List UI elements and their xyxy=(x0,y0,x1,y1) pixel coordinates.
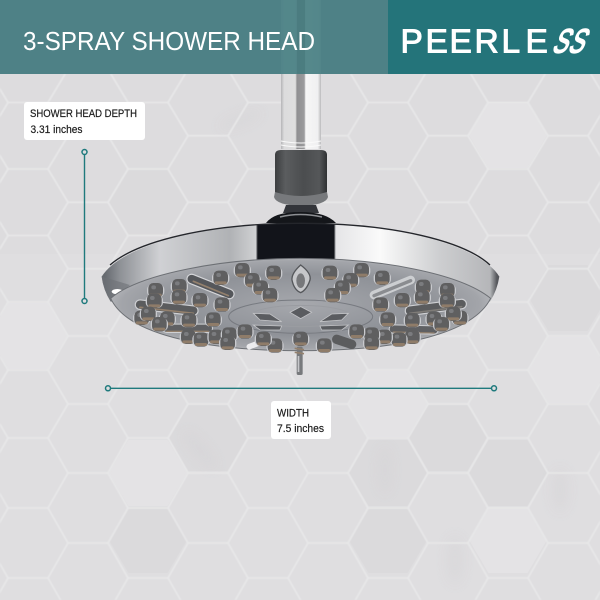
depth label: SHOWER HEAD DEPTH xyxy=(30,108,137,120)
swivel collar xyxy=(266,150,336,223)
depth dimension line xyxy=(82,150,87,304)
header band: brand panel xyxy=(388,0,600,74)
brand logo: S xyxy=(548,23,579,60)
rim upper dark edge xyxy=(110,223,490,265)
depth label: 3.31 inches xyxy=(30,124,83,136)
width dimension line xyxy=(106,386,496,391)
brand logo: PEERLE xyxy=(400,23,548,60)
header band: title area xyxy=(0,0,388,74)
rim lower shading xyxy=(102,277,130,302)
round spray nozzles xyxy=(133,263,469,353)
spray face plate xyxy=(111,258,491,351)
width label: WIDTH xyxy=(277,408,309,420)
long slot nozzles xyxy=(140,279,462,347)
brand logo: S xyxy=(564,23,595,60)
depth label xyxy=(24,102,145,140)
lever stem xyxy=(292,332,309,375)
title: 3-SPRAY SHOWER HEAD xyxy=(23,26,315,56)
top teardrop nozzle xyxy=(292,265,310,293)
centre diamonds xyxy=(253,307,348,330)
shower arm pipe xyxy=(281,0,321,149)
shower head product xyxy=(102,0,499,375)
width label: 7.5 inches xyxy=(277,423,324,435)
width label xyxy=(271,401,331,439)
highlight on rim edge xyxy=(112,289,123,294)
centre ring xyxy=(229,300,373,333)
head outer rim xyxy=(102,223,499,302)
